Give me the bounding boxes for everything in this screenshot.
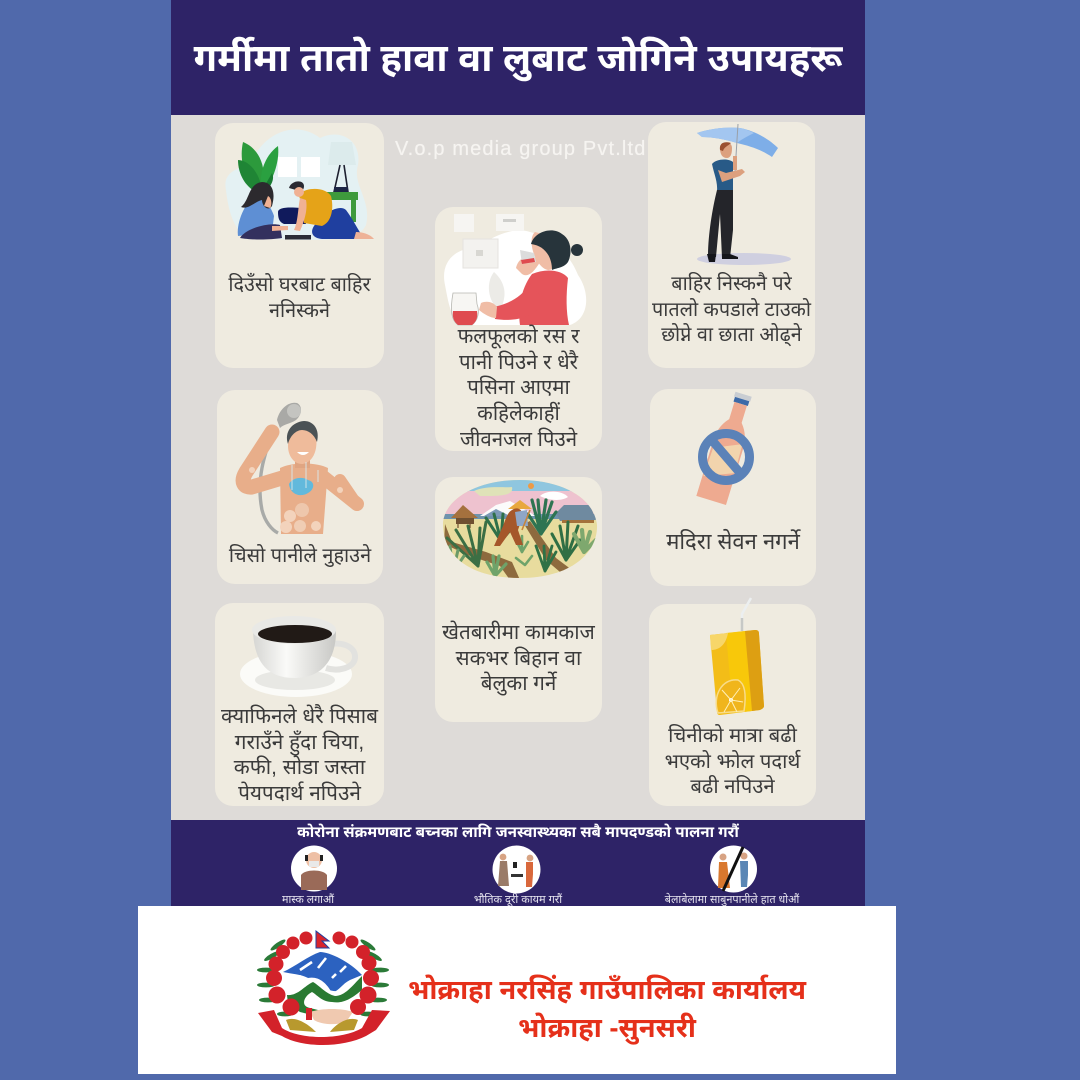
icon: woman drinking juice xyxy=(444,214,586,326)
icon: man showering xyxy=(236,402,364,534)
title: गर्मीमा तातो हावा वा लुबाट जोगिने उपायहरू xyxy=(194,37,842,80)
caption: drink juice and water: जीवनजल पिउने xyxy=(460,429,577,451)
caption: farm work timing: सकभर बिहान वा xyxy=(456,647,581,670)
panel: drink juice and water card xyxy=(435,207,602,451)
panel: avoid caffeine card xyxy=(215,603,384,806)
icon: juice box with straw xyxy=(710,598,764,715)
caption: avoid caffeine: क्याफिनले धेरै पिसाब xyxy=(221,705,378,728)
caption: drink juice and water: कहिलेकाहीं xyxy=(477,403,560,425)
panel: no alcohol card xyxy=(650,389,816,586)
icon: couple sitting indoors xyxy=(226,130,374,240)
caption: cover head or use umbrella: बाहिर निस्कनै परे xyxy=(671,273,792,295)
watermark text: V.o.p media group Pvt.ltd xyxy=(395,138,646,160)
icon: mask xyxy=(291,846,337,892)
caption: drink juice and water xyxy=(458,324,580,451)
icon: crossed out bottle xyxy=(696,392,754,505)
panel: farm work card xyxy=(435,477,602,722)
icon: physical distance xyxy=(492,846,540,894)
caption: avoid caffeine xyxy=(221,704,378,805)
icon: man with umbrella xyxy=(697,124,791,265)
caption: avoid caffeine: पेयपदार्थ नपिउने xyxy=(238,782,361,805)
caption: avoid sugary drinks: चिनीको मात्रा बढी xyxy=(668,725,797,747)
poster background panel xyxy=(171,115,865,820)
caption: avoid caffeine: कफी, सोडा जस्ता xyxy=(234,756,365,779)
caption: stay indoors: ननिस्कने xyxy=(269,300,330,322)
organisation name text xyxy=(408,974,806,1045)
caption: cover head or use umbrella: पातलो कपडाले टाउको xyxy=(652,299,811,321)
header band with title xyxy=(171,0,865,115)
caption: no alcohol: मदिरा सेवन नगर्ने xyxy=(666,529,800,554)
caption: stay indoors: दिउँसो घरबाट बाहिर xyxy=(228,274,371,296)
panel: umbrella card xyxy=(648,122,815,368)
caption: drink juice and water: पानी पिउने र धेरै xyxy=(459,352,578,374)
icon: coffee cup on saucer xyxy=(240,625,358,697)
caption: avoid caffeine: गराउँने हुँदा चिया, xyxy=(235,731,364,754)
icon: hand washing xyxy=(710,846,757,892)
organisation name text: भोक्राहा -सुनसरी xyxy=(518,1012,696,1043)
caption: cold shower: चिसो पानीले नुहाउने xyxy=(229,545,371,567)
icon: farmer in field xyxy=(443,480,597,578)
caption: avoid sugary drinks: भएको झोल पदार्थ xyxy=(665,751,800,773)
organisation name text: भोक्राहा नरसिंह गाउँपालिका कार्यालय xyxy=(408,974,806,1005)
caption: cover head or use umbrella: छोप्ने वा छाता ओढ्ने xyxy=(661,324,802,346)
caption: farm work timing: बेलुका गर्ने xyxy=(481,672,556,695)
footer heading: कोरोना संक्रमणबाट बच्नका लागि जनस्वास्थ्यका सबै मापदण्डको पालना गरौं xyxy=(297,824,739,841)
panel: cold shower card xyxy=(217,390,383,584)
caption: cover head or use umbrella xyxy=(652,272,812,346)
caption: avoid sugary drinks: बढी नपिउने xyxy=(690,776,775,798)
caption: drink juice and water: पसिना आएमा xyxy=(467,377,570,399)
panel: avoid sugary drinks card xyxy=(649,604,816,806)
icon: Nepal emblem xyxy=(257,930,390,1045)
caption: stay indoors xyxy=(228,272,371,322)
caption: drink juice and water: फलफूलको रस र xyxy=(458,326,579,348)
caption: wear mask: मास्क लगाऔं xyxy=(282,894,334,906)
caption: wash hands: बेलाबेलामा साबुनपानीले हात धोऔं xyxy=(665,894,799,906)
footer band: public health guidance xyxy=(171,820,865,906)
panel: stay indoors card xyxy=(215,123,384,368)
caption: farm work timing: खेतबारीमा कामकाज xyxy=(442,621,595,644)
caption: avoid sugary drinks xyxy=(665,724,801,798)
caption: keep distance: भौतिक दूरी कायम गरौं xyxy=(474,894,562,906)
caption: farm work timing xyxy=(442,620,596,696)
panel: municipality banner xyxy=(138,906,896,1074)
